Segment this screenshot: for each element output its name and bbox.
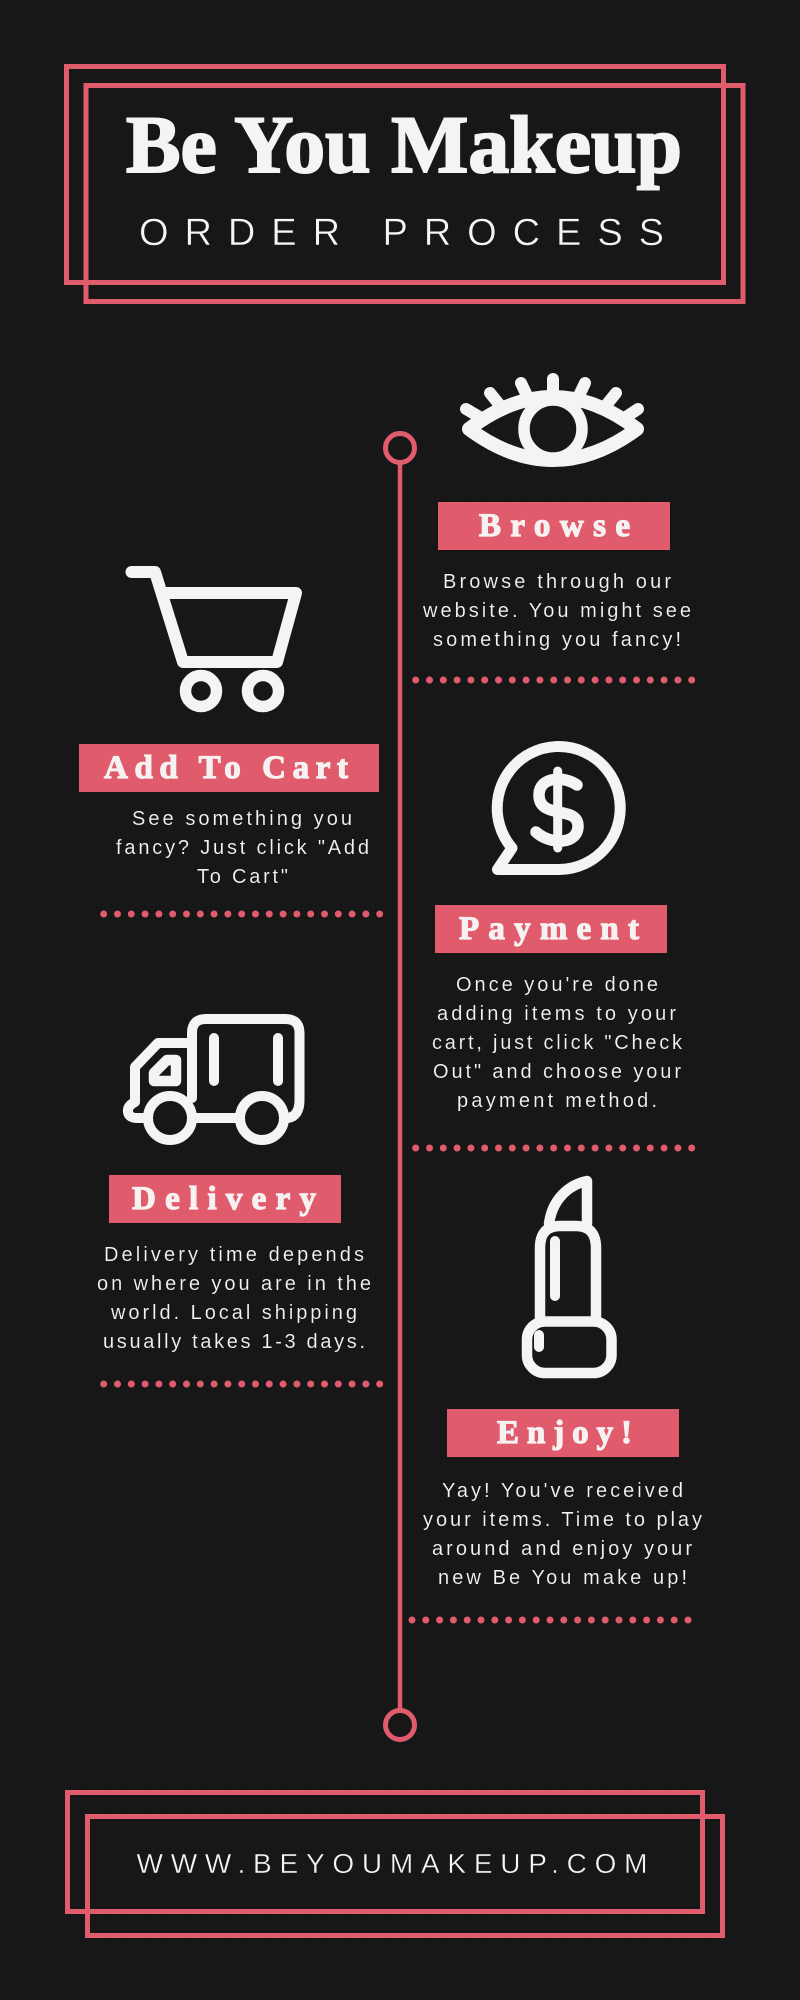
icon: lipstick [527, 1181, 612, 1373]
text block: payment: payment method. [457, 1090, 657, 1112]
footer panel [68, 1792, 722, 1936]
heading: payment [435, 905, 667, 953]
text block: add to cart: To Cart" [197, 866, 288, 888]
subtitle: ORDER PROCESS [139, 212, 664, 254]
heading: enjoy: Enjoy! [497, 1415, 632, 1451]
text block: browse [422, 571, 691, 651]
heading: delivery: Delivery [132, 1181, 316, 1217]
icon: delivery truck [128, 1019, 300, 1140]
icon: shopping cart [132, 572, 296, 706]
title: Be You Makeup [126, 99, 682, 190]
text block: browse: Browse through our [443, 571, 671, 593]
text block: payment: cart, just click "Check [432, 1032, 683, 1054]
header frames [66, 66, 743, 302]
header panel [66, 66, 743, 302]
heading: browse: Browse [479, 508, 630, 544]
icon: dollar speech bubble [497, 747, 620, 870]
heading: add to cart [79, 744, 379, 792]
text block: add to cart [116, 808, 369, 888]
text block: enjoy [423, 1480, 702, 1589]
text block: payment [432, 974, 683, 1112]
heading: delivery [109, 1175, 341, 1223]
text block: payment: Once you're done [456, 974, 658, 996]
text block: enjoy: your items. Time to play [423, 1509, 702, 1531]
heading: add to cart: Add To Cart [104, 750, 348, 786]
panel: enjoy [412, 1181, 702, 1620]
website url: WWW.BEYOUMAKEUP.COM [136, 1848, 648, 1879]
text block: browse: something you fancy! [433, 629, 681, 651]
text block: delivery [97, 1244, 371, 1353]
text block: add to cart: fancy? Just click "Add [116, 837, 369, 859]
footer frames [68, 1792, 722, 1936]
text block: enjoy: Yay! You've received [442, 1480, 683, 1502]
text block: payment: Out" and choose your [433, 1061, 681, 1083]
panel: delivery [97, 1019, 380, 1384]
text block: payment: adding items to your [437, 1003, 676, 1025]
text block: enjoy: new Be You make up! [438, 1567, 687, 1589]
text block: enjoy: around and enjoy your [432, 1538, 692, 1560]
text block: delivery: world. Local shipping [110, 1302, 357, 1324]
timeline [386, 434, 414, 1740]
heading: browse [438, 502, 670, 550]
panel: add to cart [79, 572, 380, 914]
heading: payment: Payment [459, 911, 639, 947]
text block: delivery: on where you are in the [97, 1273, 371, 1295]
panel: browse [416, 379, 692, 680]
text block: add to cart: See something you [132, 808, 352, 830]
text block: delivery: usually takes 1-3 days. [103, 1331, 365, 1353]
heading: enjoy [447, 1409, 679, 1457]
text block: delivery: Delivery time depends [104, 1244, 364, 1266]
icon: eye [466, 379, 638, 460]
panel: payment [416, 747, 692, 1148]
text block: browse: website. You might see [422, 600, 691, 622]
